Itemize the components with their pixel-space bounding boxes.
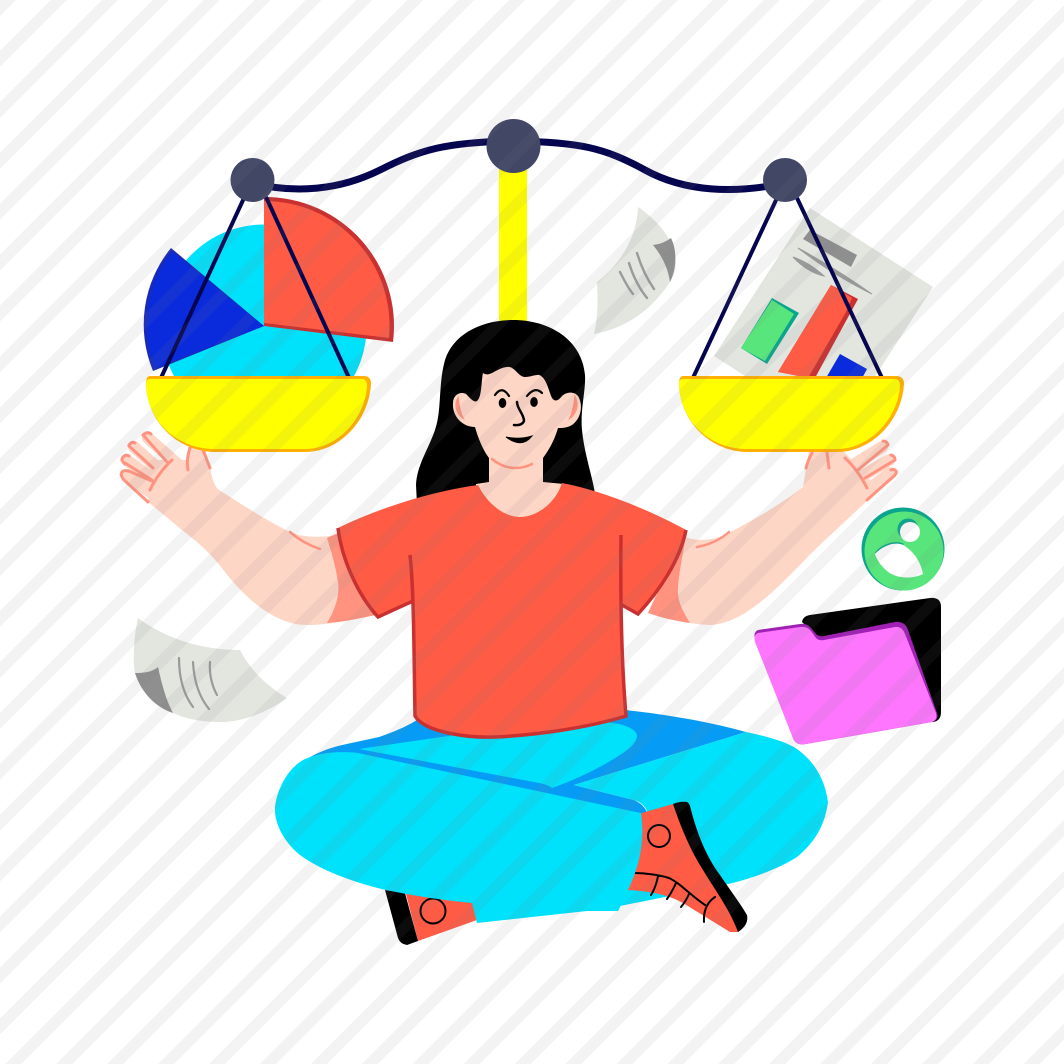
facial features (495, 390, 542, 443)
trousers: left leg (275, 752, 642, 923)
scale post (499, 165, 527, 325)
scale pan: right (679, 376, 904, 452)
scale pan: left (146, 376, 371, 452)
trousers: crossed shin (359, 722, 637, 788)
shoe: left (385, 890, 477, 945)
bar: blue (826, 354, 867, 382)
bar: green (741, 298, 799, 364)
scale pivots (230, 119, 807, 202)
icon: user badge (862, 508, 944, 590)
pie slice: blue (144, 248, 264, 371)
trousers: dark inner area (305, 710, 746, 820)
pie chart on left pan (144, 197, 394, 430)
pie slice: red (264, 197, 394, 342)
t-shirt (338, 483, 686, 737)
shoe: right (628, 802, 747, 932)
left arm and hand (121, 433, 375, 625)
bar: red (778, 285, 858, 378)
face, ears and neck (453, 367, 581, 522)
scale beam and cords (160, 141, 883, 380)
hair (416, 320, 596, 505)
floating paper: top centre (594, 207, 676, 334)
trousers: right leg (574, 732, 828, 911)
icon: folder (754, 598, 941, 744)
report page with bars on right pan (714, 208, 933, 435)
right arm and hand (648, 441, 896, 625)
floating paper: left (134, 618, 287, 722)
